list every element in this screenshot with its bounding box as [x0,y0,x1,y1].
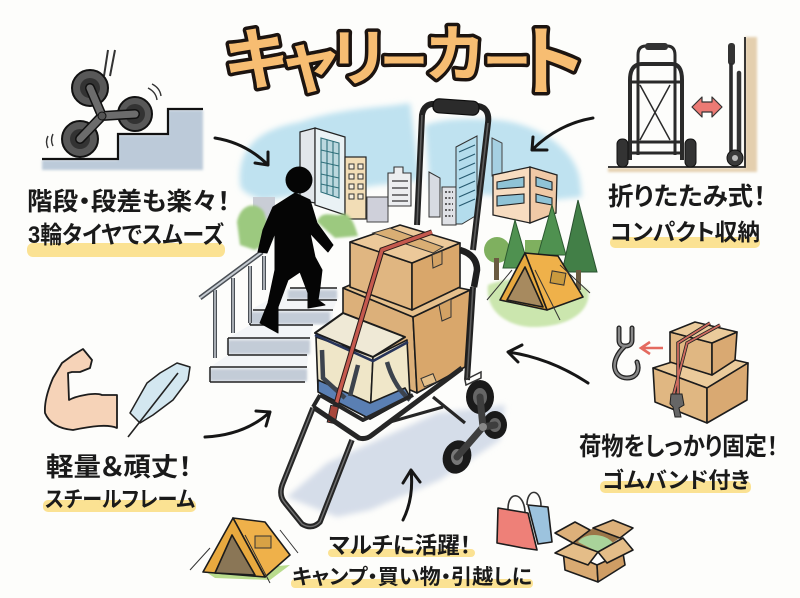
main carry cart with cargo [281,98,507,527]
panel: folding [608,37,766,248]
background: sky wash [240,103,582,200]
arrow: secure to center [508,345,588,383]
icon: strapped boxes [653,322,748,423]
cart handle frame [417,98,488,380]
background: office building [493,167,557,223]
text: folding benefit: コンパクト収納 [610,219,760,245]
title: キ [224,23,286,99]
text: folding benefit [608,183,766,248]
title: ー [381,36,427,89]
text: stair benefit: 3輪タイヤでスムーズ [28,221,224,249]
icon: moving box [555,520,633,582]
lower cardboard box [343,272,470,393]
arrow: stairs to center [215,138,268,165]
text: light and strong benefit: 軽量＆頑丈！ [46,452,192,482]
three-wheel tire assembly [438,372,507,478]
icon: tent [190,518,298,583]
text: multi-use benefit [291,532,533,589]
title [224,21,584,106]
cart lower frame [281,368,465,527]
title: ー [484,36,530,89]
cart ground shadow [287,405,505,517]
panel: secure cargo [579,322,778,493]
arrow: multi-use to center [403,470,420,520]
cooler bag [315,313,410,419]
text: secure benefit [579,433,778,493]
text: multi-use benefit: キャンプ・買い物・引越しに [292,566,532,589]
text: multi-use benefit: マルチに活躍！ [329,532,471,558]
staircase with railing [200,252,337,382]
panel: multi-use [190,492,633,589]
title: カ [426,21,484,90]
red elastic strap [327,232,432,424]
background: grass, trees and tent [484,200,597,327]
text: secure benefit: 荷物をしっかり固定！ [579,433,778,461]
panel: light and strong [43,349,196,512]
icon: shopping bags [497,492,552,550]
icon: folding cart views [608,37,757,172]
walking person silhouette [258,166,333,333]
icon: stairs and tri-wheel [42,50,203,170]
arrow: strength to center [205,411,270,437]
panel: stair climbing [27,50,230,257]
text: light and strong benefit [43,452,196,512]
text: secure benefit: ゴムバンド付き [602,468,750,493]
icon: feather [128,363,190,437]
icon: hook [615,328,638,378]
text: stair benefit [27,188,230,257]
upper cardboard box [350,225,460,310]
title: ャ [282,26,338,100]
title: ト [520,21,584,106]
icon: red arrow [641,342,663,354]
text: folding benefit: 折りたたみ式！ [608,183,766,211]
arrow: folding to center [532,118,593,150]
icon: flexed arm [45,349,117,430]
text: light and strong benefit: スチールフレーム [45,487,195,512]
background: city skyline [237,128,502,250]
text: stair benefit: 階段・段差も楽々！ [27,188,230,216]
title: リ [331,25,385,94]
